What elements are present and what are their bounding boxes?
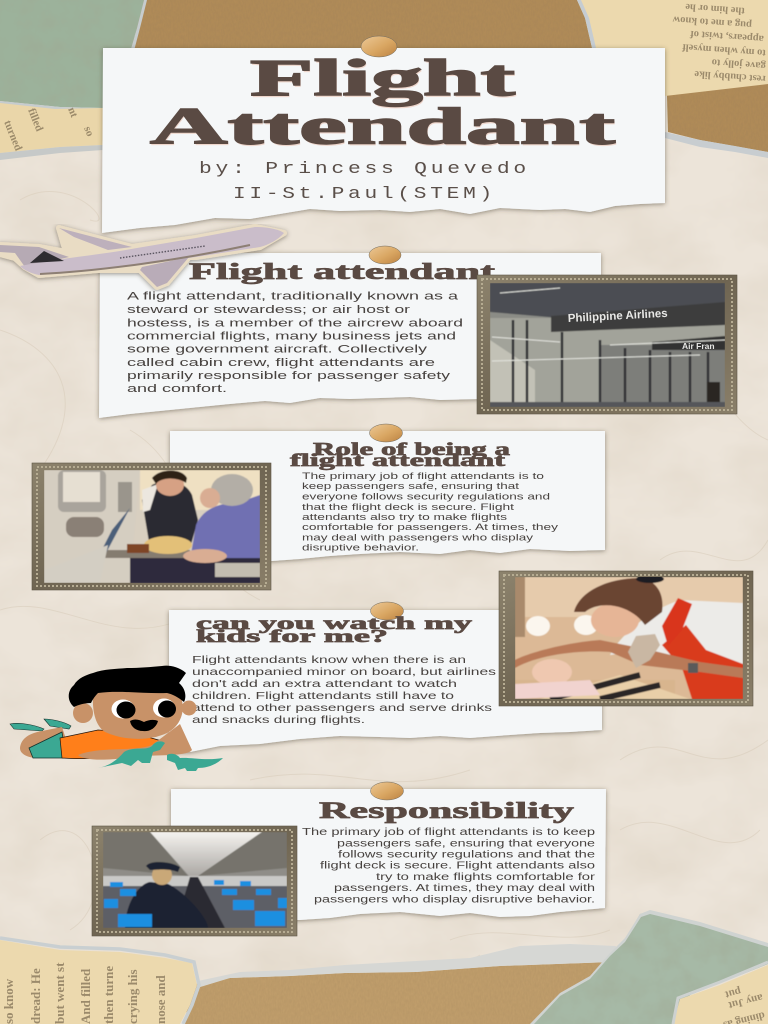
body text: kids: children. Flight attendants still have to	[192, 691, 454, 702]
body text: role: comfortable for passengers. At times, they	[302, 522, 559, 532]
body text: definition: primarily responsible for passenger safety	[127, 370, 451, 382]
title: Flight	[250, 50, 516, 107]
arm	[78, 724, 192, 760]
heading: role	[290, 439, 510, 470]
scrap: newspaper top left: turned	[1, 119, 24, 153]
photo: Philippine Airlines terminal	[490, 283, 725, 407]
photo frame: serving meal	[32, 463, 271, 590]
panel: can you watch my kids	[169, 602, 602, 752]
body text: kids: don't add an extra attendant to watch	[192, 679, 457, 690]
body text: role: keep passengers safe, ensuring that	[302, 481, 520, 491]
scrap: brown kraft bottom	[185, 944, 645, 1024]
scrap: newspaper bottom left: but went st	[52, 962, 67, 1024]
body text: definition: and comfort.	[127, 383, 227, 395]
body text: role: that the flight deck is secure. Flight	[302, 502, 515, 512]
title: Attendant	[151, 100, 617, 157]
mouth	[130, 719, 158, 731]
heading: kids: kids for me?	[196, 626, 388, 646]
body text: kids	[192, 655, 496, 726]
photo: cabin with screens	[103, 832, 287, 928]
body text: responsibility: passengers. At times, they may deal with	[334, 883, 595, 894]
scrap: brown kraft top	[120, 0, 768, 158]
pin: title	[361, 36, 397, 57]
subtitle: author: II-St.Paul(STEM)	[233, 185, 496, 204]
pin: section 4	[370, 782, 404, 800]
body text: responsibility: passengers who display disruptive behavior.	[314, 894, 595, 906]
body text: definition: called cabin crew, flight attendants are	[127, 357, 435, 369]
panel: flight attendant definition	[99, 246, 601, 418]
photo: attendant and passenger	[44, 470, 260, 583]
scrap: newspaper bottom right: put	[724, 985, 742, 1001]
panel: title	[102, 36, 665, 233]
body text: definition: hostess, is a member of the aircrew aboard	[127, 318, 463, 330]
body text: definition: steward or stewardess; or air host or	[127, 304, 410, 316]
illustration: boy with toy dinosaurs	[10, 666, 223, 771]
body text: role	[302, 471, 559, 552]
scrap: newspaper top right: gave jolly to	[711, 56, 766, 71]
pin: section 3	[370, 602, 404, 620]
body text: responsibility	[302, 827, 596, 906]
scrap: newspaper bottom left: And filled	[78, 968, 93, 1024]
body text: role: may deal with passengers who display	[302, 532, 534, 542]
pin: section 1	[369, 246, 401, 264]
panel: role of being a flight attendant	[170, 424, 605, 565]
heading: kids	[196, 613, 472, 646]
body text: role: disruptive behavior.	[302, 542, 419, 552]
scrap: newspaper top right: appears, twist of	[689, 28, 764, 44]
title: Attendant	[150, 98, 616, 156]
scrap: green paper top left	[0, 0, 150, 112]
toy dinosaur large	[98, 741, 165, 768]
photo: baby and attendant	[515, 575, 743, 699]
body text: responsibility: follows security regulations and that the	[338, 850, 596, 860]
body text: role: everyone follows security regulations and	[302, 492, 550, 502]
body text: definition: commercial flights, many business jets and	[127, 330, 456, 342]
legs	[20, 727, 68, 758]
ears	[73, 703, 93, 723]
scrap: newspaper top right: the him or he	[685, 1, 745, 16]
body text: definition	[127, 290, 463, 395]
heading: role: flight attendant	[290, 450, 505, 470]
torso	[60, 730, 169, 759]
body text: responsibility: flight deck is secure. Flight attendants also	[320, 860, 596, 872]
body text: definition: A flight attendant, traditionally known as a	[127, 290, 459, 302]
toy dinosaur small	[167, 754, 223, 771]
body text: kids: Flight attendants know when there is an	[192, 655, 466, 666]
scrap: newspaper top left: nt	[65, 106, 80, 120]
scrap: newspaper top left: so	[81, 125, 96, 139]
pin: section 2	[370, 424, 402, 442]
eyes	[112, 698, 176, 718]
scrap: newspaper bottom right	[673, 962, 768, 1024]
photo frame: attendant with baby	[499, 571, 753, 706]
scrap: newspaper bottom left: nose and	[153, 974, 168, 1024]
body text: responsibility: try to make flights comfortable for	[376, 872, 596, 883]
title: Flight	[251, 52, 517, 108]
panel: responsibility	[171, 782, 606, 920]
subtitle: author: by: Princess Quevedo	[199, 160, 530, 179]
scrap: newspaper bottom left: crying his	[125, 969, 140, 1024]
scrap: newspaper top left: filled	[25, 107, 45, 133]
torn paper: top scraps	[0, 0, 768, 160]
body text: responsibility: passengers safe, ensuring that everyone	[337, 838, 596, 850]
body text: role: The primary job of flight attendants is to	[302, 471, 544, 481]
body text: definition: some government aircraft. Collectively	[127, 344, 428, 356]
torn paper: bottom scraps	[0, 910, 768, 1024]
scrap: newspaper top right: to my when myself	[681, 41, 766, 58]
photo frame: airport	[477, 275, 737, 414]
heading: role: Role of being a	[313, 439, 510, 459]
subtitle: author	[199, 160, 530, 204]
hair	[69, 666, 186, 707]
feet	[10, 719, 71, 731]
scrap: newspaper top right	[577, 0, 768, 96]
body text: kids: unaccompanied minor on board, but airlines	[192, 667, 496, 678]
body text: kids: and snacks during flights.	[192, 715, 365, 726]
body text: kids: attend to other passengers and serve drinks	[192, 703, 492, 714]
heading: responsibility: Responsibility	[319, 798, 575, 823]
scrap: newspaper top right: rest chubby like	[694, 68, 766, 84]
scrap: newspaper bottom left: so know	[1, 978, 16, 1024]
head	[93, 684, 183, 739]
heading: flight attendant: Flight attendant	[189, 259, 496, 284]
scrap: newspaper top left	[0, 103, 103, 160]
photo: Philippine Airlines terminal: Air Fran	[682, 341, 715, 351]
airplane cutout	[0, 227, 284, 287]
title	[150, 50, 617, 157]
scrap: newspaper top right: pug a me to know	[672, 13, 752, 30]
body text: role: attendants also try to make flights	[302, 512, 508, 522]
scrap: newspaper bottom left: dread: He	[28, 968, 43, 1024]
scrap: newspaper bottom left: then turne	[101, 966, 116, 1024]
heading: kids: can you watch my	[196, 613, 472, 633]
body text: responsibility: The primary job of flight attendants is to keep	[302, 827, 596, 838]
photo frame: cabin aisle	[92, 826, 297, 936]
photo: Philippine Airlines terminal: Philippine Airlines	[568, 308, 668, 325]
scrap: newspaper bottom left	[0, 938, 199, 1024]
scrap: green paper bottom right	[530, 910, 768, 1024]
scrap: newspaper bottom right: any Jut	[727, 991, 764, 1011]
